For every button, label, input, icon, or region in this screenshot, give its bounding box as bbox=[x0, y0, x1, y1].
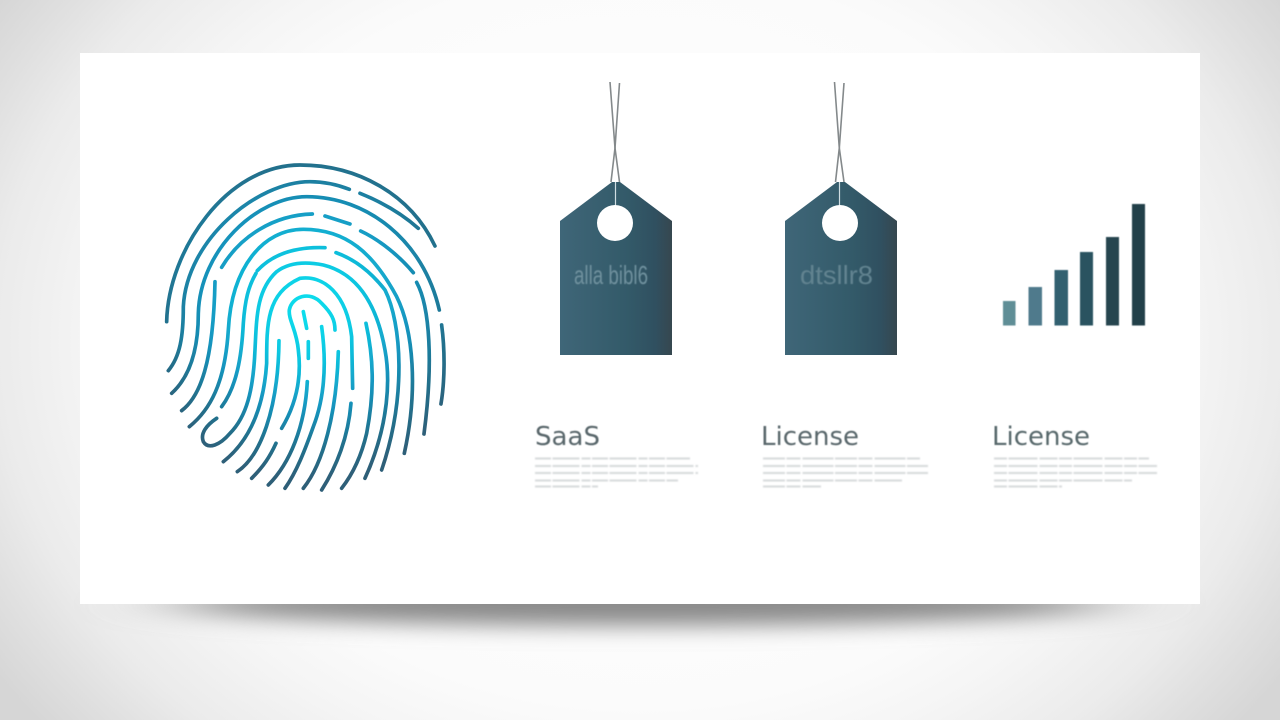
tag label: dtsllr8 bbox=[800, 260, 873, 290]
tag strings bbox=[834, 82, 844, 182]
tag slit bbox=[614, 182, 616, 206]
tag body bbox=[785, 182, 897, 355]
tag hole bbox=[597, 205, 633, 241]
heading: License (third column): License bbox=[992, 422, 1090, 452]
heading: SaaS: SaaS bbox=[535, 422, 600, 452]
card shadow bbox=[170, 582, 1110, 626]
tag hole bbox=[822, 205, 858, 241]
text block: third License placeholder lines bbox=[994, 458, 1157, 486]
heading: License (second column): License bbox=[761, 422, 859, 452]
tag slit bbox=[838, 182, 840, 206]
price tag: SaaS bbox=[560, 82, 672, 355]
tag strings bbox=[610, 82, 620, 182]
icon: fingerprint bbox=[167, 165, 444, 490]
text block: second License placeholder lines bbox=[763, 458, 928, 486]
panel: white card bbox=[80, 53, 1200, 604]
tag body bbox=[560, 182, 672, 355]
bar chart bbox=[1003, 204, 1145, 326]
text block: SaaS placeholder lines bbox=[535, 458, 698, 486]
price tag: License bbox=[785, 82, 897, 355]
tag label: alla bibl6 bbox=[574, 260, 648, 290]
